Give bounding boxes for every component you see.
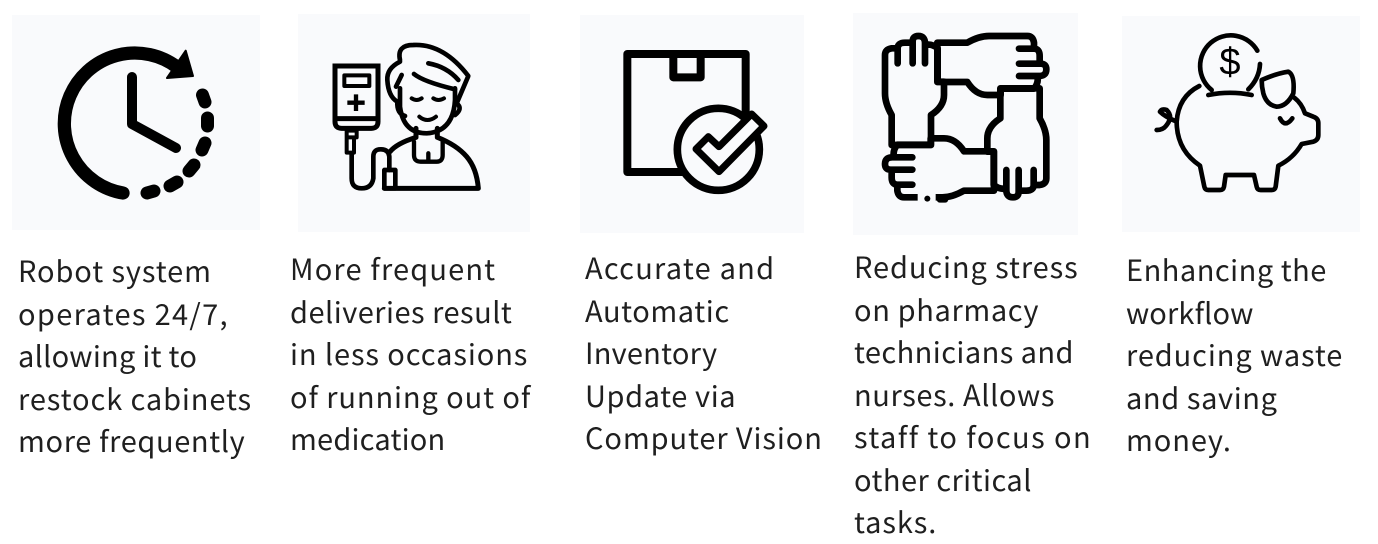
panel: box background [580,15,804,233]
text: 24/7 operation: operates 24/7, [18,292,229,334]
text: 24/7 operation: restock cabinets [18,376,252,418]
text: accurate inventory: Computer Vision [585,416,823,458]
icon: piggy bank with coin [1157,35,1318,190]
text: reducing stress [854,245,1092,542]
text: reducing stress: on pharmacy [854,288,1039,330]
text: reducing waste: reducing waste [1126,333,1343,375]
text: reducing stress: technicians and [854,330,1074,372]
text: reducing waste: workflow [1126,290,1254,332]
panel: clock background [12,15,260,230]
panel: patient background [298,14,530,232]
text: frequent deliveries: in less occasions [290,332,528,374]
text: reducing stress: nurses. Allows [854,372,1055,414]
text: reducing waste: Enhancing the [1126,248,1327,290]
text: frequent deliveries: medication [290,417,445,459]
text: accurate inventory: Update via [585,374,736,416]
icon: clock with circular arrow [64,51,208,193]
text: frequent deliveries [290,247,532,459]
text: accurate inventory [585,246,823,458]
icon: piggy bank with coin: $ [1219,42,1241,84]
text: reducing stress: Reducing stress [854,245,1079,287]
panel: piggy bank background [1122,16,1360,232]
text: 24/7 operation: more frequently [18,419,245,461]
icon: patient with IV bag [335,45,478,188]
icon: box with check mark [627,54,764,190]
panel: hands background [853,13,1078,235]
text: accurate inventory: Automatic [585,288,730,330]
text: reducing waste [1126,248,1343,460]
text: reducing stress: other critical [854,458,1032,500]
text: 24/7 operation [18,249,252,461]
text: 24/7 operation: Robot system [18,249,212,291]
text: frequent deliveries: More frequent [290,247,496,289]
text: reducing waste: money. [1126,418,1232,460]
text: reducing stress: staff to focus on [854,415,1092,457]
text: frequent deliveries: of running out of [290,374,531,416]
text: reducing waste: and saving [1126,376,1278,418]
text: 24/7 operation: allowing it to [18,334,197,376]
icon: four linked hands [885,36,1046,202]
text: reducing stress: tasks. [854,500,937,542]
text: frequent deliveries: deliveries result [290,290,512,332]
text: accurate inventory: Inventory [585,331,717,373]
text: accurate inventory: Accurate and [585,246,775,288]
